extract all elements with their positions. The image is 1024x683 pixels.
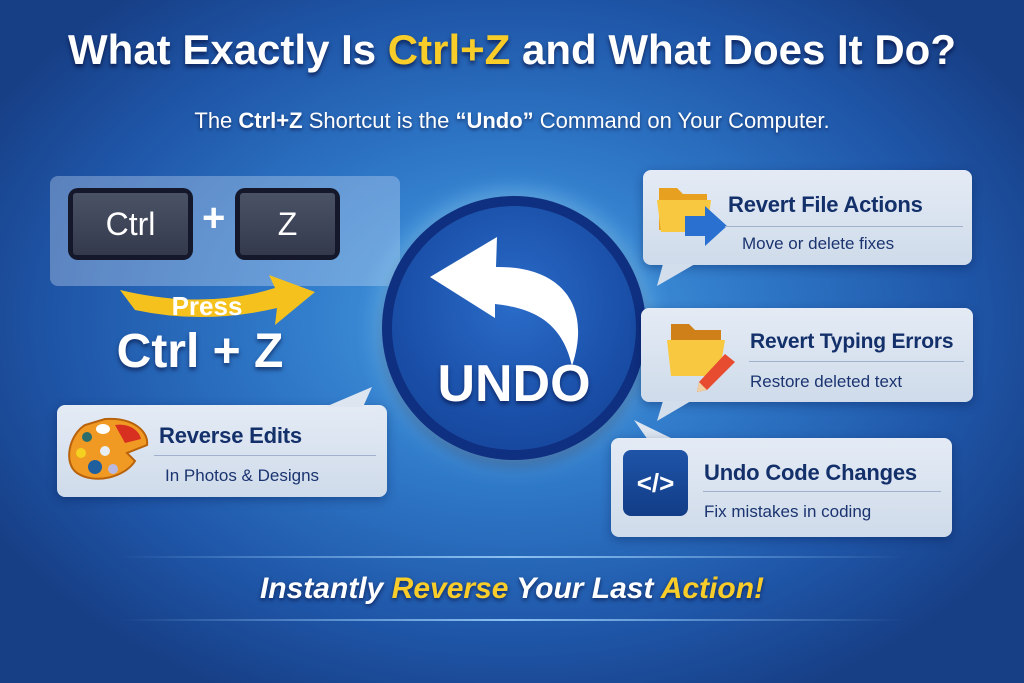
icon: undo arrow bbox=[430, 237, 578, 365]
heading: Undo Code Changes bbox=[704, 460, 917, 485]
callout tail bbox=[657, 265, 694, 286]
icon: folder with pencil bbox=[667, 324, 735, 392]
arrow: press bbox=[120, 275, 315, 325]
subtitle: The Ctrl+Z Shortcut is the “Undo” Command on Your Computer. bbox=[194, 108, 830, 133]
icon: code bbox=[623, 450, 688, 516]
callout tail: code bbox=[634, 420, 671, 438]
key: Ctrl: Ctrl bbox=[106, 206, 155, 242]
text: Move or delete fixes bbox=[742, 234, 894, 253]
key: Z: Z bbox=[278, 206, 297, 242]
icon: code: </> bbox=[637, 468, 674, 498]
key: Ctrl bbox=[68, 188, 193, 260]
text: Restore deleted text bbox=[750, 372, 902, 391]
icon: palette bbox=[68, 418, 148, 480]
plus sign: + bbox=[202, 196, 225, 240]
panel: keyboard keys bbox=[50, 176, 400, 286]
heading: Revert Typing Errors bbox=[750, 330, 953, 353]
heading: reverse edits: Reverse Edits bbox=[159, 423, 302, 448]
callout tail: reverse edits bbox=[330, 387, 372, 405]
undo button bbox=[382, 196, 646, 460]
label: UNDO: UNDO bbox=[437, 355, 591, 413]
panel: reverse edits bbox=[57, 405, 387, 497]
big Ctrl + Z: Ctrl + Z bbox=[117, 325, 283, 378]
key: Z bbox=[235, 188, 340, 260]
panel: undo code changes bbox=[611, 438, 952, 537]
arrow: press: Press bbox=[172, 291, 242, 321]
callout tail bbox=[657, 402, 690, 421]
text: photos: In Photos & Designs bbox=[165, 466, 319, 485]
tagline: Instantly Reverse Your Last Action! bbox=[260, 572, 764, 605]
panel: revert file actions bbox=[643, 170, 972, 265]
heading: Revert File Actions bbox=[728, 192, 923, 217]
icon: folder with arrow bbox=[657, 188, 727, 246]
text: Fix mistakes in coding bbox=[704, 502, 871, 521]
title: What Exactly Is Ctrl+Z and What Does It Do? bbox=[68, 26, 956, 73]
panel: revert typing errors bbox=[641, 308, 973, 402]
